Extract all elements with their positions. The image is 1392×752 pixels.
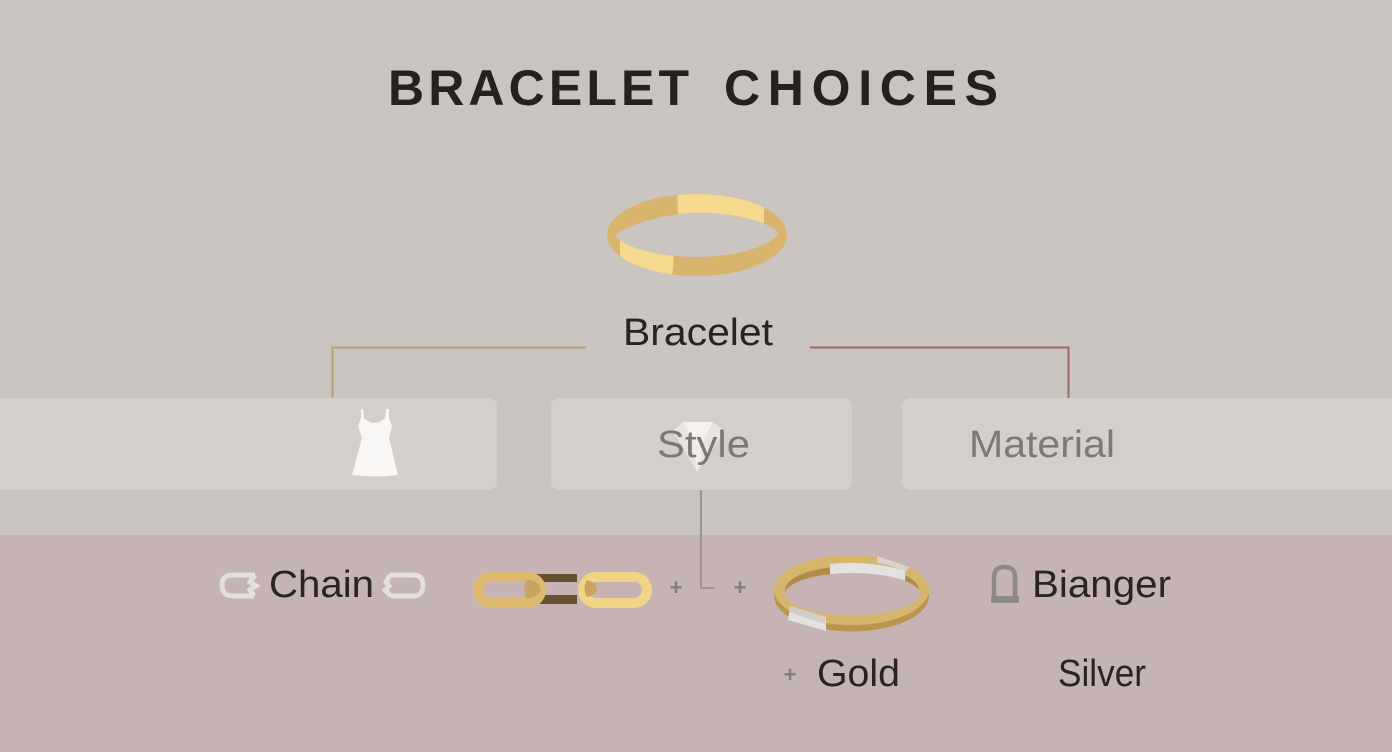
label: chain: Chain <box>269 564 374 606</box>
label: bracelet: Bracelet <box>623 312 773 354</box>
connector: root to right panel <box>810 348 1068 398</box>
title <box>388 60 998 116</box>
icon: bangle <box>991 567 1019 603</box>
label: style: Style <box>657 424 750 466</box>
icon: gold and silver bracelet <box>774 555 929 632</box>
icon: plus right: + <box>734 575 746 600</box>
title: BRACELET <box>388 60 689 116</box>
connector: root to left panel <box>332 348 586 398</box>
icon: plus gold: + <box>784 662 796 687</box>
label: gold: Gold <box>817 653 900 695</box>
icon: plus left: + <box>670 575 682 600</box>
label: bianger: Bianger <box>1032 564 1171 606</box>
background: lower band <box>0 535 1392 752</box>
label: material: Material <box>969 424 1115 466</box>
icon: diamond <box>673 422 725 472</box>
panel: occasion card <box>0 398 497 490</box>
label: silver: Silver <box>1058 653 1146 695</box>
panel: style card <box>551 398 852 490</box>
panel: bracelet root node <box>586 190 810 375</box>
icon: gold bracelet <box>607 194 787 276</box>
icon: gold chain links <box>478 574 647 604</box>
panel: material card <box>902 398 1392 490</box>
connector: style to options <box>701 490 715 588</box>
title: CHOICES <box>724 60 998 116</box>
icon: left open link <box>222 575 256 596</box>
icon: right open link <box>385 575 423 596</box>
icon: dress <box>352 409 398 476</box>
background: upper band <box>0 0 1392 536</box>
